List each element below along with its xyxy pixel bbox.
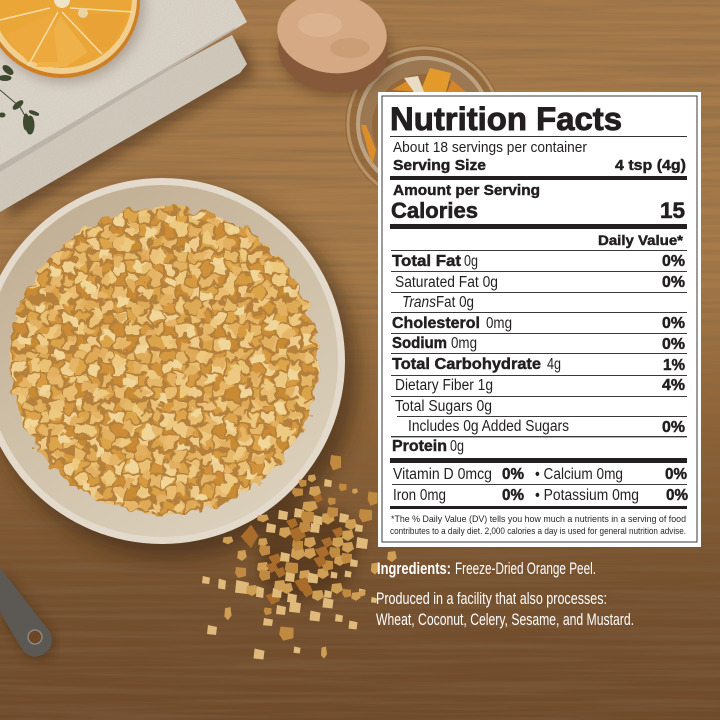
nutrition facts panel <box>378 92 701 547</box>
nutrient rows: 0% <box>662 253 685 270</box>
ingredients and allergen text: Produced in a facility that also processes: <box>376 590 607 608</box>
peel pile <box>10 207 318 515</box>
nutrient rows: Sodium <box>392 335 447 352</box>
nutrient rows: 0g <box>464 253 478 270</box>
vitamins and minerals: 0% <box>666 487 688 504</box>
spilled orange peel pile <box>202 455 397 660</box>
ingredients and allergen text: Freeze-Dried Orange Peel. <box>455 560 596 578</box>
vitamins and minerals: 0% <box>665 466 687 483</box>
serving information: 4 tsp (4g) <box>615 157 686 174</box>
daily value footnote <box>390 514 686 537</box>
nutrient rows: 0mg <box>486 315 512 332</box>
nutrient rows: Total Carbohydrate <box>392 356 541 373</box>
ingredients and allergen text <box>376 560 634 629</box>
nutrient rows: 1% <box>663 357 685 374</box>
title: Nutrition Facts <box>390 101 622 137</box>
ingredients and allergen text: Ingredients: <box>377 560 451 578</box>
vitamins and minerals <box>390 458 688 509</box>
calories: 15 <box>660 198 685 223</box>
nutrient rows: Total Fat <box>392 253 461 270</box>
nutrient rows: 0% <box>662 336 685 353</box>
metal scoop handle <box>0 568 54 660</box>
vitamins and minerals: • Potassium 0mg <box>535 487 639 504</box>
bowl of orange peel <box>0 178 358 558</box>
cork lid <box>272 0 393 99</box>
nutrient rows: 0% <box>662 419 685 436</box>
nutrient rows: 0g <box>450 438 464 455</box>
nutrient rows: 0% <box>662 274 685 291</box>
nutrient rows: Trans <box>402 294 436 311</box>
vitamins and minerals: 0% <box>502 487 524 504</box>
calories: Calories <box>391 198 478 223</box>
nutrient rows: 0% <box>662 315 685 332</box>
daily value header: Daily Value* <box>598 232 684 248</box>
nutrient rows: 4% <box>662 377 685 394</box>
nutrient rows: Dietary Fiber 1g <box>395 377 493 394</box>
nutrient rows: Protein <box>392 438 447 455</box>
thyme sprig <box>0 64 39 134</box>
vitamins and minerals: Iron 0mg <box>393 487 446 504</box>
vitamins and minerals: • Calcium 0mg <box>535 466 623 483</box>
calories <box>390 182 687 229</box>
dried orange slice <box>0 0 144 82</box>
daily value footnote: *The % Daily Value (DV) tells you how much a nutrients in a serving of food <box>391 514 686 525</box>
serving information: Serving Size <box>393 157 486 174</box>
glass jar with orange peel <box>345 45 503 203</box>
nutrient rows: Saturated Fat 0g <box>395 274 498 291</box>
nutrient rows: 4g <box>547 356 561 373</box>
serving information <box>390 136 687 180</box>
serving information: About 18 servings per container <box>393 139 587 156</box>
nutrient rows <box>391 250 687 455</box>
ingredients and allergen text: Wheat, Coconut, Celery, Sesame, and Mustard. <box>376 611 634 629</box>
vitamins and minerals: 0% <box>502 466 524 483</box>
folded linen napkin <box>0 0 255 220</box>
nutrient rows: Total Sugars 0g <box>395 398 492 415</box>
vitamins and minerals: Vitamin D 0mcg <box>393 466 492 483</box>
nutrient rows: Cholesterol <box>392 315 480 332</box>
nutrient rows: Fat 0g <box>436 294 474 311</box>
calories: Amount per Serving <box>393 182 540 199</box>
nutrient rows: 0mg <box>451 335 477 352</box>
nutrient rows: Includes 0g Added Sugars <box>408 418 569 435</box>
